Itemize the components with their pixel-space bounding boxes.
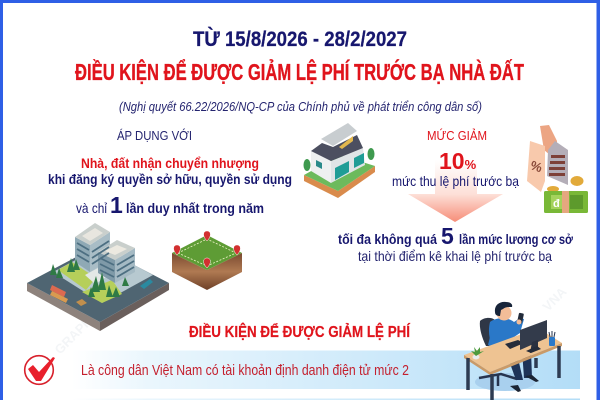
- text: maximum cap: lần mức lương cơ sở: [459, 231, 573, 247]
- heading: reduction: MỨC GIẢM: [427, 128, 487, 143]
- icon: receipts, calculator and money: [527, 125, 588, 213]
- panel: condition row: [25, 350, 580, 389]
- text: once a year: lần duy nhất trong năm: [126, 200, 264, 216]
- text: once a year: và chỉ: [76, 201, 107, 216]
- row background: [72, 350, 580, 389]
- text: registration: khi đăng ký quyền sở hữu, quyền sử dụng: [48, 171, 292, 187]
- text: maximum cap: [338, 223, 573, 249]
- next row edge: [72, 398, 580, 400]
- icon: man at desk with phone: [464, 302, 562, 400]
- text: fee rate: mức thu lệ phí trước bạ: [392, 173, 519, 189]
- heading: applies to: ÁP DỤNG VỚI: [117, 128, 192, 143]
- text: once a year: 1: [110, 192, 123, 218]
- text: once a year: [76, 192, 264, 218]
- watermark: VNA: [540, 284, 570, 314]
- panel: reduction: [338, 128, 573, 264]
- icon: house on plot: [304, 123, 375, 198]
- subtitle: (Nghị quyết 66.22/2026/NQ-CP của Chính phủ về phát triển công dân số): [119, 99, 482, 114]
- text: property transfer: Nhà, đất nhận chuyển nhượng: [81, 155, 259, 171]
- text: condition: Là công dân Việt Nam có tài khoản định danh điện tử mức 2: [81, 363, 409, 379]
- icon: receipts, calculator and money: %: [529, 157, 545, 175]
- heading: conditions: ĐIỀU KIỆN ĐỂ ĐƯỢC GIẢM LỆ PHÍ: [189, 323, 411, 341]
- icon: land plot with pins: [172, 231, 242, 290]
- arrow: down: [408, 160, 503, 222]
- title: date range: TỪ 15/8/2026 - 28/2/2027: [193, 27, 407, 51]
- icon: receipts, calculator and money: đ: [553, 198, 560, 210]
- watermark: GRAPHICS: [52, 298, 111, 357]
- icon: red check mark: [25, 356, 55, 384]
- icon: city block with office building: [27, 223, 169, 331]
- watermark: [52, 284, 570, 357]
- figure: 10 percent: 10%: [439, 148, 477, 174]
- text: maximum cap: 5: [441, 223, 454, 249]
- text: maximum cap: tối đa không quá: [338, 231, 437, 247]
- panel: applies to: [48, 128, 292, 218]
- text: declaration time: tại thời điểm kê khai lệ phí trước bạ: [358, 248, 552, 264]
